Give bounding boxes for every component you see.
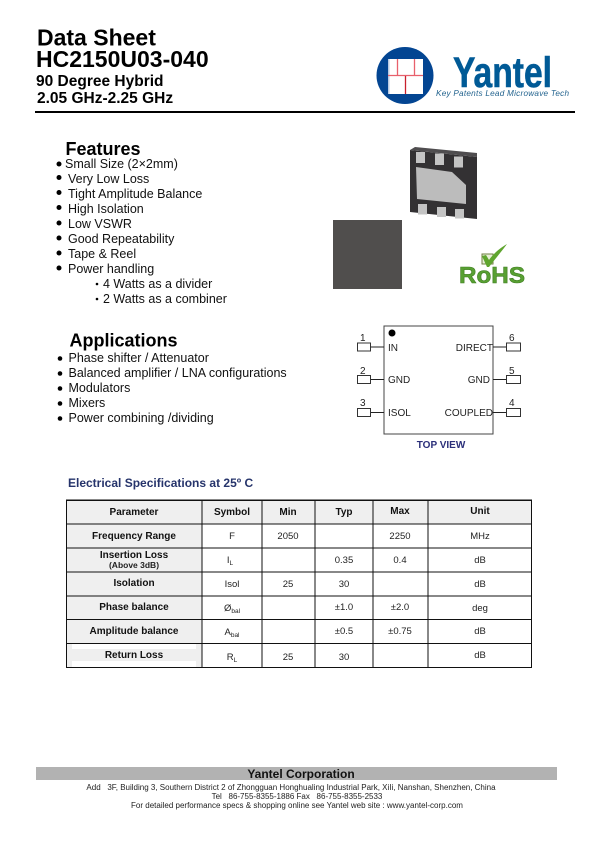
row: insertion loss: Insertion Loss [100, 550, 169, 561]
row: phase balance: Phase balance [99, 602, 169, 613]
pinout diagram: 6 [509, 333, 515, 344]
row: phase balance: ±1.0 [335, 602, 353, 613]
row: insertion loss: (Above 3dB) [109, 560, 159, 570]
pinout diagram: ISOL [388, 408, 411, 419]
applications list: Mixers [68, 396, 105, 410]
pinout diagram: COUPLED [445, 408, 493, 419]
pinout diagram: 1 [360, 333, 366, 344]
header row: Symbol [214, 507, 250, 518]
row: return loss: L [234, 657, 238, 664]
row: insertion loss: 0.4 [393, 555, 407, 566]
header row: Typ [335, 507, 353, 518]
row: return loss: dB [474, 650, 486, 661]
applications list: Modulators [68, 381, 130, 395]
features list: Good Repeatability [68, 232, 175, 246]
RoHS mark: RoHS [459, 262, 525, 288]
row: phase balance [99, 602, 488, 615]
chip photo: package top [333, 220, 402, 289]
logo: Yantel [376, 47, 569, 104]
row: amplitude balance: Amplitude balance [90, 626, 179, 637]
row: phase balance: Ø [224, 603, 231, 614]
row: isolation: Isolation [113, 578, 155, 589]
header title block: 90 Degree Hybrid [36, 73, 164, 90]
row: amplitude balance: ±0.5 [335, 626, 353, 637]
pinout diagram [358, 326, 520, 451]
header row: Max [390, 506, 410, 517]
row: amplitude balance: dB [474, 626, 486, 637]
row: isolation: 25 [283, 579, 293, 590]
features list: Small Size (2×2mm) [65, 157, 178, 171]
pin 1 dot [388, 330, 396, 336]
logo tagline: Key Patents Lead Microwave Tech [436, 89, 569, 98]
row: isolation: 30 [339, 579, 349, 590]
row: insertion loss: I [227, 555, 230, 566]
features list: Tight Amplitude Balance [68, 187, 202, 201]
row: return loss [105, 650, 486, 664]
applications list: Power combining /dividing [68, 411, 214, 425]
footer contact text: Tel 86-755-8355-1886 Fax 86-755-8355-2533 [212, 792, 383, 801]
features list [56, 157, 227, 306]
features list: 4 Watts as a divider [103, 277, 212, 291]
row: frequency range: MHz [470, 531, 490, 542]
specifications table [66, 500, 532, 668]
header title block: HC2150U03-040 [36, 46, 209, 72]
pinout diagram: 4 [509, 398, 515, 409]
pinout diagram: 3 [360, 398, 366, 409]
caption: top view: TOP VIEW [417, 440, 466, 451]
row: isolation [113, 578, 486, 590]
row: phase balance: deg [472, 603, 488, 614]
features list: Tape & Reel [68, 247, 136, 261]
pinout diagram: DIRECT [456, 343, 493, 354]
features list: Power handling [68, 262, 154, 276]
table shading [66, 500, 532, 668]
footer contact text: For detailed performance specs & shopping online see Yantel web site : www.yantel-corp.com [131, 801, 463, 810]
features list: Low VSWR [68, 217, 132, 231]
pinout diagram: 2 [360, 366, 366, 377]
row: return loss: 30 [339, 652, 349, 663]
row: return loss: Return Loss [105, 650, 164, 661]
row: return loss: R [227, 652, 234, 663]
header rule [35, 111, 575, 113]
icon: logo circle [376, 47, 434, 104]
applications list [58, 351, 287, 425]
row: insertion loss: 0.35 [335, 555, 353, 566]
row: phase balance: ±2.0 [391, 602, 409, 613]
row: insertion loss [100, 550, 486, 570]
applications list: Phase shifter / Attenuator [68, 351, 209, 365]
row: isolation: Isol [225, 579, 239, 590]
features list: Very Low Loss [68, 172, 149, 186]
footer contact text: Add 3F, Building 3, Southern District 2 of Zhongguan Honghualing Industrial Park, XiIi, Nanshan, Shenzhen, China [86, 783, 496, 792]
pinout diagram: IN [388, 343, 398, 354]
row: insertion loss: L [230, 560, 234, 567]
heading: Features: Features [66, 139, 141, 159]
row: frequency range: 2250 [389, 531, 411, 542]
row: phase balance: bal [231, 608, 241, 615]
icon: check box [482, 244, 507, 267]
logo wordmark: Yantel [453, 49, 552, 97]
footer bar: Yantel Corporation [247, 767, 355, 781]
row: insertion loss: dB [474, 555, 486, 566]
header row: Unit [470, 506, 490, 517]
RoHS mark [459, 244, 525, 288]
chip photo: package underside [410, 147, 477, 219]
row: isolation: dB [474, 579, 486, 590]
heading: Applications: Applications [70, 330, 178, 350]
row: frequency range: Frequency Range [92, 531, 176, 542]
pinout diagram: GND [468, 375, 490, 386]
header title block: Data Sheet [37, 24, 156, 50]
footer contact text [86, 783, 496, 810]
row: amplitude balance: ±0.75 [388, 626, 412, 637]
heading: electrical specifications: Electrical Specifications at 25º C [68, 476, 253, 490]
row: return loss: 25 [283, 652, 293, 663]
row: frequency range [92, 531, 490, 542]
header row: Parameter [110, 507, 159, 518]
header row: Min [279, 507, 297, 518]
row: amplitude balance: bal [231, 632, 240, 639]
row: amplitude balance: A [224, 627, 231, 638]
row: frequency range: 2050 [277, 531, 299, 542]
header title block: 2.05 GHz-2.25 GHz [37, 90, 173, 107]
footer bar [36, 767, 557, 781]
header row [110, 506, 490, 518]
package outline [384, 326, 493, 434]
features list: 2 Watts as a combiner [103, 292, 227, 306]
applications list: Balanced amplifier / LNA configurations [68, 366, 287, 380]
row: frequency range: F [229, 531, 235, 542]
features list: High Isolation [68, 202, 144, 216]
pinout diagram: 5 [509, 366, 515, 377]
pinout diagram: GND [388, 375, 410, 386]
row: amplitude balance [90, 626, 486, 639]
header title block [36, 24, 209, 107]
